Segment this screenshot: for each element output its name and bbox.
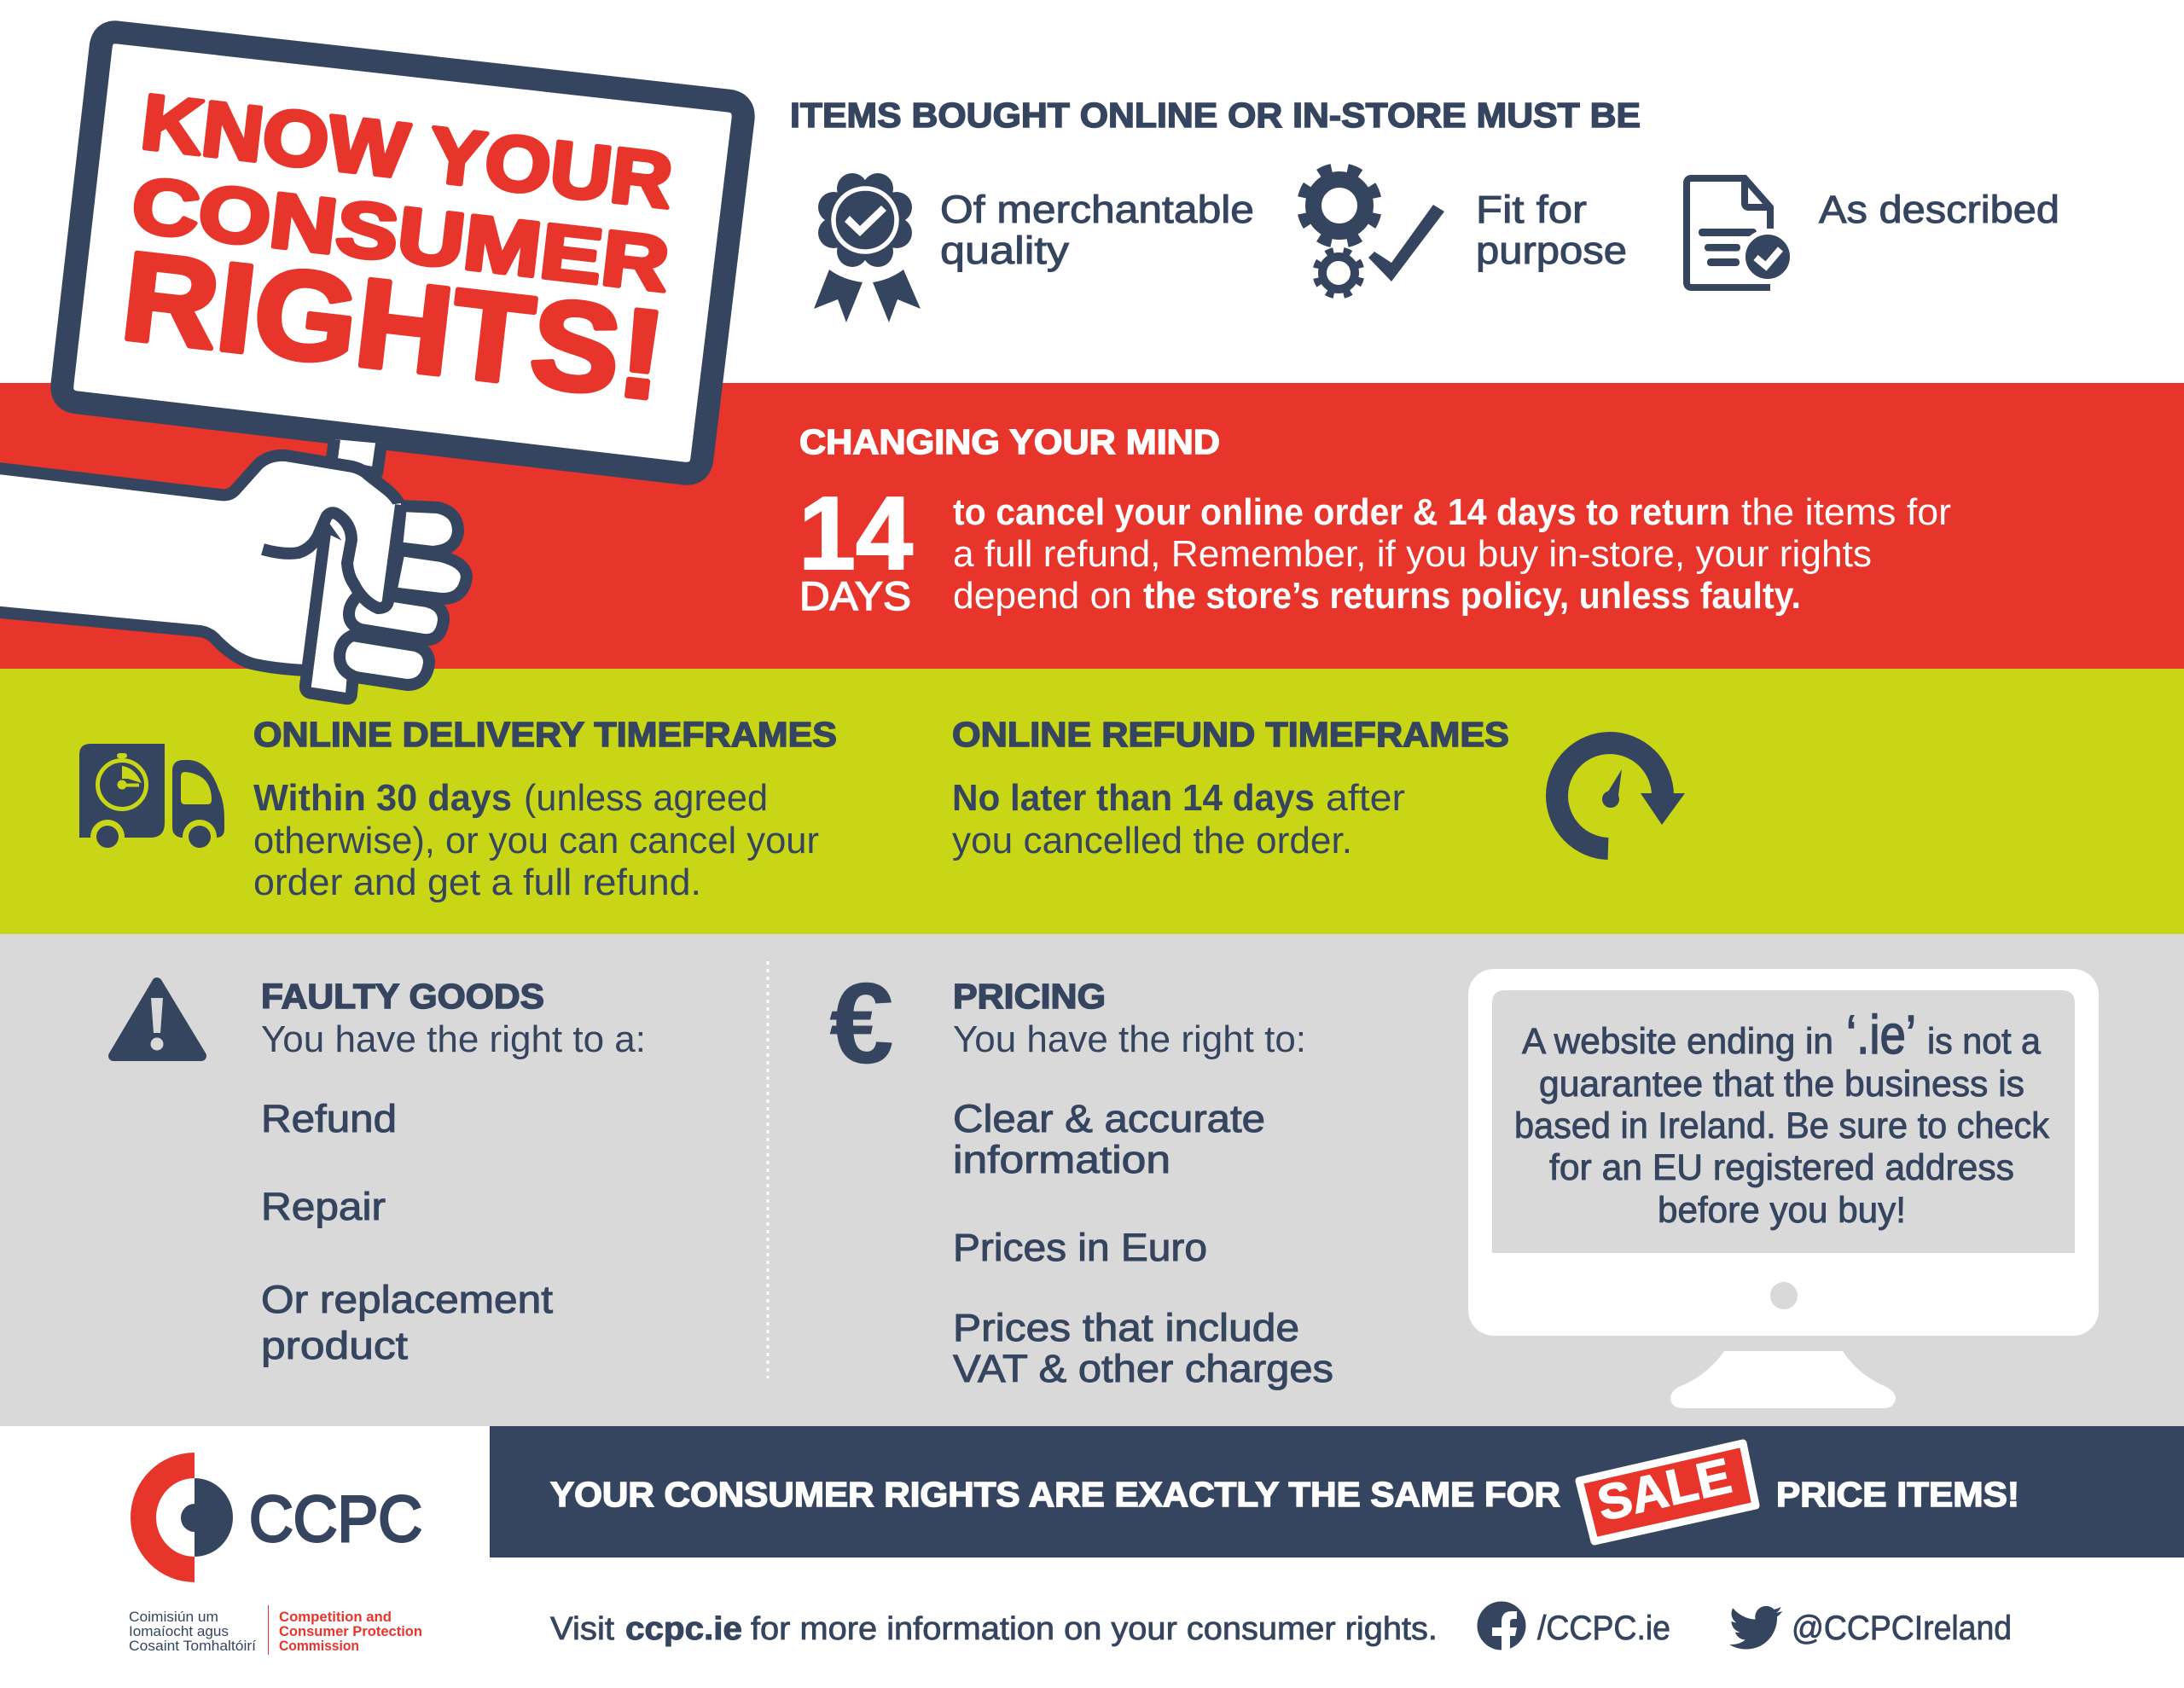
icon: rosette ribbon [814, 173, 921, 322]
dotted divider [766, 961, 770, 1378]
power button [1770, 1282, 1798, 1309]
list: refund, repair, replacement: Or replacement [261, 1278, 554, 1321]
banner text left: YOUR CONSUMER RIGHTS ARE EXACTLY THE SAME FOR [550, 1475, 1560, 1514]
icon: euro sign: € [829, 959, 894, 1088]
sale tag [1579, 1443, 1756, 1541]
body text: (unless agreed [524, 777, 768, 819]
English name [268, 1605, 422, 1655]
section: changing your mind [799, 422, 1951, 618]
list: pricing rights: Prices that include [953, 1306, 1299, 1349]
list: pricing rights: Clear & accurate [953, 1097, 1265, 1140]
intro text: You have the right to a: [261, 1018, 646, 1060]
heading: ONLINE REFUND TIMEFRAMES [952, 715, 1509, 754]
twitter handle: @CCPCIreland [1792, 1610, 2012, 1647]
as described label: As described [1819, 188, 2059, 231]
list: refund, repair, replacement: Refund [261, 1097, 397, 1140]
icon: gears and tick [1297, 163, 1444, 299]
title line 2: CONSUMER [128, 162, 673, 308]
screen text: guarantee that the business is [1539, 1064, 2024, 1105]
footer contact line [550, 1602, 2012, 1650]
icon: document with tick [1687, 178, 1792, 287]
icon: delivery truck [79, 744, 224, 854]
sale tag: SALE [1593, 1448, 1736, 1532]
section: pricing [829, 959, 1333, 1390]
facebook handle: /CCPC.ie [1537, 1610, 1670, 1647]
website text: Visit [550, 1611, 614, 1647]
screen text [1514, 1004, 2049, 1231]
list: pricing rights [953, 1097, 1333, 1390]
banner: sale items [490, 1426, 2184, 1557]
body text: the items for [1741, 491, 1951, 533]
logo: CCPC [129, 1453, 422, 1655]
list: pricing rights: Prices in Euro [953, 1226, 1207, 1269]
fit for purpose label [1476, 188, 1627, 272]
heading: FAULTY GOODS [261, 977, 544, 1016]
monitor screen [1492, 990, 2075, 1253]
body text: Within 30 days [253, 777, 512, 819]
Irish name: Coimisiún um [129, 1609, 218, 1625]
body text [953, 491, 1951, 617]
monitor stand [1670, 1351, 1896, 1408]
screen text: before you buy! [1658, 1190, 1906, 1231]
body text: otherwise), or you can cancel your [253, 820, 819, 861]
monitor body [1468, 969, 2099, 1336]
body text: order and get a full refund. [253, 861, 701, 903]
body text: you cancelled the order. [952, 820, 1352, 861]
English name: Consumer Protection [279, 1623, 422, 1639]
band: grey [0, 934, 2184, 1426]
band: green [0, 669, 2184, 934]
Irish name [129, 1609, 256, 1654]
icon: twitter [1729, 1606, 1782, 1650]
body text: after [1326, 777, 1405, 819]
quality label: quality [940, 229, 1070, 272]
title line 3: RIGHTS! [115, 226, 671, 426]
section: faulty goods [113, 977, 646, 1367]
hand holding the sign [0, 439, 467, 699]
list: refund, repair, replacement: product [261, 1324, 409, 1367]
screen text: ‘.ie’ [1846, 1004, 1916, 1065]
website text: for more information on your consumer rights. [751, 1611, 1438, 1647]
heading: ITEMS BOUGHT ONLINE OR IN-STORE MUST BE [790, 96, 1641, 135]
body text: depend on [953, 575, 1132, 617]
list: pricing rights: information [953, 1138, 1170, 1181]
band: red [0, 383, 2184, 669]
banner background [490, 1426, 2184, 1557]
icon: clock arrow [1557, 743, 1685, 849]
Irish name: Iomaíocht agus [129, 1623, 229, 1639]
sign held by hand [0, 32, 743, 699]
body text: the store’s returns policy, unless faulty. [1143, 575, 1801, 617]
list: refund, repair, replacement [261, 1097, 554, 1367]
body text: No later than 14 days [952, 777, 1315, 819]
screen text: based in Ireland. Be sure to check [1514, 1105, 2049, 1146]
icon: warning triangle [113, 983, 201, 1056]
Irish name: Cosaint Tomhaltóirí [129, 1638, 256, 1654]
logo wordmark: CCPC [249, 1483, 422, 1556]
banner text right: PRICE ITEMS! [1776, 1475, 2019, 1514]
English name: Commission [279, 1638, 359, 1654]
title line 1: KNOW YOUR [137, 79, 677, 225]
heading: PRICING [953, 977, 1106, 1016]
heading: ONLINE DELIVERY TIMEFRAMES [253, 715, 837, 754]
quality label: Of merchantable [940, 188, 1254, 231]
screen text: is not a [1927, 1021, 2041, 1062]
logo mark [131, 1453, 233, 1582]
list: refund, repair, replacement: Repair [261, 1185, 386, 1228]
fit for purpose label: Fit for [1476, 188, 1587, 231]
intro text: You have the right to: [953, 1018, 1306, 1060]
icon: facebook [1478, 1602, 1525, 1650]
fit for purpose label: purpose [1476, 229, 1627, 272]
screen text: for an EU registered address [1549, 1147, 2014, 1188]
sign board [62, 32, 743, 473]
screen text: A website ending in [1522, 1021, 1833, 1062]
callout: computer monitor [1468, 969, 2099, 1408]
English name: Competition and [279, 1609, 392, 1625]
website text: ccpc.ie [625, 1611, 742, 1647]
heading: CHANGING YOUR MIND [799, 422, 1220, 461]
section: items bought must be [790, 96, 2059, 322]
14 days figure: DAYS [799, 573, 911, 618]
section: delivery timeframes [79, 715, 837, 903]
body text [253, 777, 819, 903]
list: pricing rights: VAT & other charges [953, 1347, 1333, 1390]
14 days figure: 14 [799, 475, 913, 591]
section: refund timeframes [952, 715, 1685, 861]
body text: to cancel your online order & 14 days to return [953, 491, 1730, 533]
title: know your consumer rights [115, 79, 677, 426]
quality label [940, 188, 1254, 272]
body text: a full refund, Remember, if you buy in-store, your rights [953, 533, 1872, 575]
body text [952, 777, 1405, 861]
